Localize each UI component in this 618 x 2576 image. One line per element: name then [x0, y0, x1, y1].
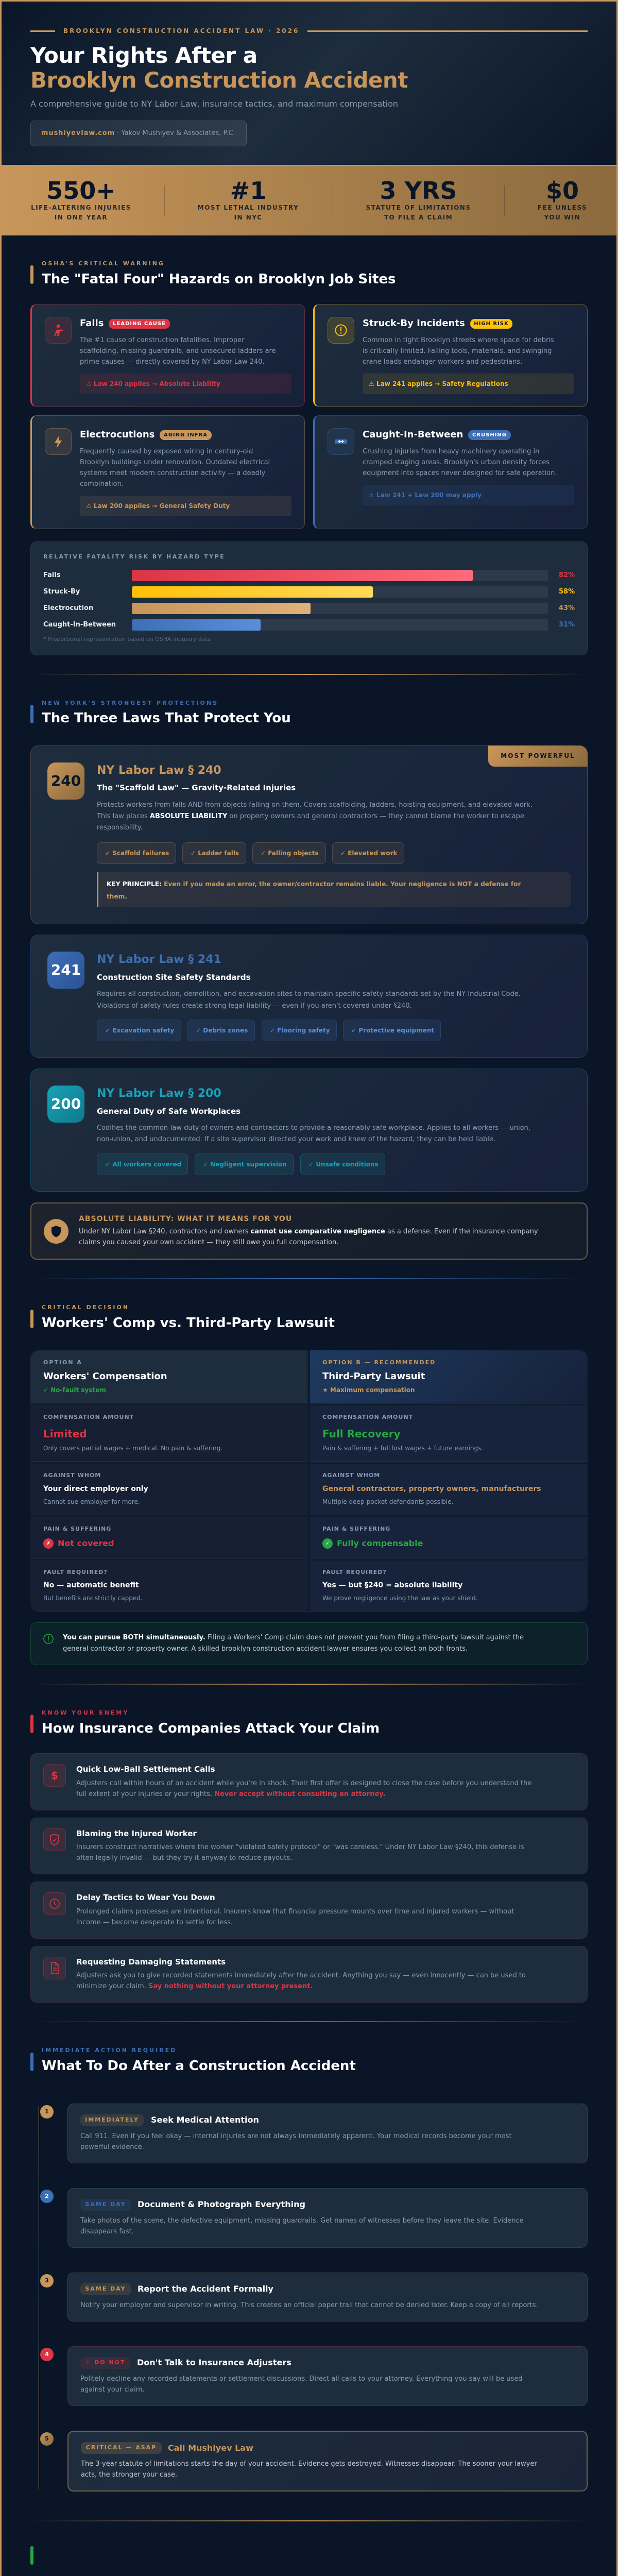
law description: responsibility.	[97, 824, 143, 832]
time pill: IMMEDIATELY	[85, 2116, 139, 2123]
description	[76, 1972, 526, 1990]
title: Quick Low-Ball Settlement Calls	[76, 1765, 215, 1774]
time pill	[80, 2114, 144, 2126]
callout text: Under NY Labor Law §240, contractors and owners cannot use comparative negligence as a defense. Even if the insurance company	[79, 1228, 538, 1235]
row: pain and suffering, left: Not covered	[58, 1538, 114, 1548]
ribbon: most powerful: MOST POWERFUL	[501, 752, 575, 759]
callout	[80, 496, 291, 516]
chart footnote: * Proportional representation based on OSHA industry data	[43, 636, 211, 642]
header: option b: ★ Maximum compensation	[322, 1386, 415, 1394]
hero header	[0, 0, 618, 165]
hero eyebrow rule left	[30, 30, 55, 32]
section heading: insurance: How Insurance Companies Attack Your Claim	[42, 1721, 380, 1736]
hero title	[30, 43, 408, 93]
bar: falls: Falls	[43, 571, 61, 579]
header: option a	[30, 1350, 307, 1403]
description: income — become desperate to settle for less.	[76, 1919, 233, 1926]
law description	[97, 990, 521, 1010]
header: option b: Third-Party Lawsuit	[322, 1371, 425, 1382]
step title: Report the Accident Formally	[138, 2284, 273, 2294]
title: Caught-In-Between	[363, 429, 463, 440]
tag: falling objects	[252, 842, 326, 864]
bar chart panel	[30, 541, 588, 655]
panel: law 240	[30, 745, 588, 924]
callout	[80, 374, 291, 394]
step title: Seek Medical Attention	[151, 2115, 259, 2125]
row: compensation amount, left: Limited	[43, 1428, 87, 1440]
header: option a: ✓ No-fault system	[43, 1386, 106, 1394]
description: Prolonged claims processes are intentional. Insurers know that financial pressure mounts over time and injured workers — without	[76, 1908, 514, 1916]
row: fault required, right: Yes — but §240 = absolute liability	[322, 1581, 462, 1589]
row: pain and suffering, right: ✓	[325, 1540, 330, 1547]
law number 241: 241	[51, 961, 81, 978]
row: pain and suffering, left: ✗	[46, 1540, 51, 1547]
step text	[80, 2131, 512, 2153]
tag: debris zones	[187, 1020, 255, 1041]
stat: 550+: 550+	[46, 177, 116, 205]
description: often legally invalid — but they try it anyway to reduce payouts.	[76, 1854, 292, 1862]
time pill	[80, 2283, 131, 2295]
title: Delay Tactics to Wear You Down	[76, 1893, 215, 1902]
panel: delay tactics	[30, 1882, 588, 1939]
tag: excavation safety	[97, 1020, 181, 1041]
stat: #1	[198, 177, 299, 221]
law title: NY Labor Law § 200	[97, 1087, 221, 1100]
stat: 550+	[31, 177, 131, 221]
law subtitle: The "Scaffold Law" — Gravity-Related Injuries	[97, 783, 296, 792]
bar: falls	[43, 570, 575, 581]
step text: The 3-year statute of limitations starts the day of your accident. Evidence gets destroyed. Witnesses disappear. The sooner your lawyer	[81, 2460, 537, 2468]
website pill: mushiyevlaw.com · Yakov Mushiyev & Associates, P.C.	[41, 129, 235, 137]
tag: scaffold failures	[97, 842, 176, 864]
section heading: what to do: What To Do After a Construction Accident	[42, 2058, 356, 2074]
description: minimize your claim. Say nothing without your attorney present.	[76, 1982, 313, 1990]
description	[363, 448, 557, 477]
time pill: CRITICAL — ASAP	[86, 2444, 157, 2451]
section heading: what to do	[30, 2047, 356, 2074]
description: Crushing injuries from heavy machinery operating in	[363, 448, 539, 455]
header: option a: Workers' Compensation	[43, 1371, 167, 1382]
icon: dollar	[43, 1764, 66, 1787]
law description	[97, 801, 533, 832]
step 5 marker	[40, 2432, 54, 2446]
badge: HIGH RISK	[474, 321, 509, 327]
section heading: fatal four: The "Fatal Four" Hazards on Brooklyn Job Sites	[42, 272, 396, 287]
step 3 marker	[40, 2274, 54, 2287]
description: Brooklyn buildings under renovation. Outdated electrical	[80, 459, 270, 466]
stat: $0: FEE UNLESS	[538, 204, 587, 211]
badge	[468, 430, 511, 440]
icon: dollar: $	[51, 1769, 58, 1782]
callout: absolute liability	[30, 1202, 588, 1260]
description: prime causes — directly covered by NY Labor Law 240.	[80, 358, 265, 366]
tag: ladder falls: ✓ Ladder falls	[191, 850, 239, 857]
stat: 550+: IN ONE YEAR	[55, 214, 108, 221]
ribbon: most powerful	[488, 745, 588, 767]
callout	[363, 374, 574, 394]
key principle: KEY PRINCIPLE: Even if you made an error, the owner/contractor remains liable. Your negligence is NOT a defense for	[107, 880, 521, 888]
icon: crushing arrows	[328, 428, 354, 455]
step text: powerful evidence.	[80, 2143, 144, 2151]
tag: all workers covered: ✓ All workers covered	[105, 1161, 181, 1168]
law 240 content	[47, 762, 571, 907]
bar: electrocution: 43%	[559, 604, 575, 612]
callout text: general contractor or property owner. A skilled brooklyn construction accident lawyer ensures you collect on both fronts.	[63, 1645, 468, 1653]
tag: ladder falls	[182, 842, 246, 864]
tag: flooring safety: ✓ Flooring safety	[270, 1027, 330, 1034]
row: compensation amount, left	[30, 1405, 307, 1462]
callout text: claims you caused your own accident — they still owe you full compensation.	[79, 1239, 338, 1246]
stat: $0	[538, 177, 587, 221]
section heading: fatal four: OSHA'S CRITICAL WARNING	[42, 260, 165, 267]
callout	[363, 485, 574, 505]
section heading: three laws	[30, 700, 291, 726]
callout text	[79, 1228, 538, 1246]
bar: caught-in-between: Caught-In-Between	[43, 621, 116, 629]
title: Blaming the Injured Worker	[76, 1829, 197, 1838]
section heading: three laws: The Three Laws That Protect You	[42, 710, 291, 726]
tag: falling objects: ✓ Falling objects	[261, 850, 319, 857]
key principle: them.	[107, 893, 127, 900]
step text: acts, the stronger your case.	[81, 2471, 177, 2479]
section heading: what to do: IMMEDIATE ACTION REQUIRED	[42, 2047, 177, 2054]
icon: exclamation circle	[43, 1634, 54, 1644]
row: against whom, left: Your direct employer only	[43, 1485, 148, 1493]
callout: ⚠ Law 241 applies → Safety Regulations	[369, 380, 508, 387]
time pill	[80, 2357, 130, 2369]
stat: $0: $0	[546, 177, 579, 205]
card: falls	[30, 304, 305, 407]
description	[79, 336, 276, 366]
row: against whom, left: AGAINST WHOM	[43, 1472, 101, 1479]
stat: #1: #1	[230, 177, 266, 205]
step text: disappears fast.	[80, 2228, 134, 2235]
hero eyebrow: BROOKLYN CONSTRUCTION ACCIDENT LAW · 2026	[63, 27, 299, 35]
time pill	[80, 2199, 131, 2211]
icon: lightning bolt	[45, 428, 72, 455]
comparison table	[30, 1350, 588, 1612]
hero eyebrow rule right	[307, 30, 588, 32]
description: crane loads endanger workers and pedestrians.	[363, 358, 522, 366]
description: Adjusters call within hours of an accident while you're in shock. Their first offer is designed to close the case before you understand the	[76, 1780, 531, 1787]
callout text: You can pursue BOTH simultaneously. Filing a Workers' Comp claim does not prevent you from filing a third-party lawsuit against the	[63, 1634, 524, 1641]
law number 200: 200	[51, 1095, 81, 1112]
tag: flooring safety	[262, 1020, 337, 1041]
icon: shield check	[43, 1828, 66, 1851]
row: fault required, left	[30, 1561, 307, 1612]
law number 241	[47, 952, 84, 989]
description: full extent of your injuries or your rights. Never accept without consulting an attorney.	[76, 1790, 385, 1798]
description	[76, 1780, 531, 1798]
header: option b	[310, 1350, 588, 1403]
bar: caught-in-between: 31%	[559, 621, 575, 629]
law description: Protects workers from falls AND from objects falling on them. Covers scaffolding, ladders, hoisting equipment, and elevated work.	[97, 801, 533, 809]
step text: Call 911. Even if you feel okay — internal injuries are not always immediately apparent. Your medical records become your most	[80, 2132, 512, 2140]
tag: excavation safety: ✓ Excavation safety	[105, 1027, 174, 1034]
description: Insurers construct narratives where the worker "violated safety protocol" or "was careless." Under NY Labor Law §240, this defense is	[76, 1843, 524, 1851]
bar: struck-by: Struck-By	[43, 588, 80, 596]
step text	[81, 2459, 537, 2480]
step title: Document & Photograph Everything	[138, 2199, 305, 2209]
row: compensation amount, right: Full Recovery	[322, 1428, 401, 1440]
icon: document	[43, 1957, 66, 1979]
key principle	[97, 872, 571, 907]
callout heading: ABSOLUTE LIABILITY: WHAT IT MEANS FOR YOU	[79, 1215, 292, 1223]
icon: warning circle	[328, 317, 354, 344]
row: pain and suffering, right: Fully compensable	[337, 1538, 423, 1548]
tag: elevated work	[332, 842, 404, 864]
step 4 marker: 4	[45, 2351, 49, 2358]
tag: negligent supervision: ✓ Negligent supervision	[203, 1161, 287, 1168]
step title: Call Mushiyev Law	[168, 2443, 253, 2453]
chart title: RELATIVE FATALITY RISK BY HAZARD TYPE	[43, 553, 225, 560]
law number 200	[47, 1086, 84, 1123]
step 1 marker	[40, 2105, 54, 2119]
law description	[97, 1124, 530, 1143]
step 1 marker: 1	[45, 2108, 49, 2115]
description	[80, 448, 270, 488]
law number 240	[47, 762, 84, 800]
step 5 marker: 5	[45, 2435, 49, 2442]
panel: damaging statements	[30, 1946, 588, 2003]
badge: AGING INFRA	[164, 432, 208, 438]
law subtitle: Construction Site Safety Standards	[97, 973, 251, 982]
step text: Take photos of the scene, the defective equipment, missing guardrails. Get names of witnesses before they leave the site. Evidence	[80, 2217, 524, 2225]
bar: struck-by	[43, 586, 575, 598]
step 5 card	[67, 2431, 588, 2492]
website pill	[30, 121, 247, 146]
hero title: Your Rights After a	[30, 43, 258, 68]
step 3 card	[67, 2273, 588, 2321]
row: against whom, left	[30, 1464, 307, 1515]
panel: law 241	[30, 935, 588, 1058]
bar: falls: 82%	[559, 571, 575, 579]
hero subtitle: A comprehensive guide to NY Labor Law, insurance tactics, and maximum compensation	[30, 99, 398, 109]
tag: unsafe conditions	[300, 1154, 385, 1175]
tag: negligent supervision	[195, 1154, 294, 1175]
section heading: fatal four	[30, 260, 396, 287]
bar: electrocution	[43, 603, 575, 614]
description: combination.	[80, 480, 124, 488]
section heading: three laws: NEW YORK'S STRONGEST PROTECTIONS	[42, 700, 218, 706]
tag: scaffold failures: ✓ Scaffold failures	[105, 850, 169, 857]
stat: 3 YRS: STATUTE OF LIMITATIONS	[366, 204, 471, 211]
panel: low-ball calls	[30, 1753, 588, 1810]
law subtitle: General Duty of Safe Workplaces	[97, 1107, 241, 1116]
step title: Don't Talk to Insurance Adjusters	[137, 2358, 291, 2367]
row: against whom, right: Multiple deep-pocket defendants possible.	[322, 1498, 453, 1505]
description: Adjusters ask you to give recorded statements immediately after the accident. Anything you say — even innocently — can be used to	[76, 1972, 526, 1979]
title: Struck-By Incidents	[363, 318, 465, 329]
time pill	[81, 2442, 162, 2454]
step text: Notify your employer and supervisor in writing. This creates an official paper trail that cannot be denied later. Keep a copy of all reports.	[80, 2301, 538, 2309]
row: fault required, left: But benefits are strictly capped.	[43, 1595, 143, 1602]
card: struck-by	[313, 304, 588, 407]
step text	[80, 2374, 522, 2395]
row: pain and suffering, right: PAIN & SUFFERING	[322, 1526, 390, 1532]
callout text	[63, 1634, 524, 1653]
icon: falling person	[45, 317, 72, 344]
row: pain and suffering, left	[30, 1517, 307, 1558]
step 1 card	[67, 2104, 588, 2163]
step 2 card	[67, 2188, 588, 2248]
description: cramped staging areas. Brooklyn's urban density forces	[363, 459, 550, 466]
row: fault required, right: We prove negligence using the law as your shield.	[322, 1595, 478, 1602]
law title: NY Labor Law § 240	[97, 764, 221, 777]
description: Common in tight Brooklyn streets where space for debris	[363, 336, 554, 344]
tag: elevated work: ✓ Elevated work	[340, 850, 397, 857]
hero title: Brooklyn Construction Accident	[30, 67, 408, 93]
stat: #1: MOST LETHAL INDUSTRY	[198, 204, 299, 211]
stat: $0: YOU WIN	[544, 214, 580, 221]
law description: non-union, and undocumented. If a site supervisor directed your work and knew of the hazard, they can be held liable.	[97, 1136, 495, 1143]
callout: ⚠ Law 241 + Law 200 may apply	[369, 492, 482, 499]
card: caught-in-between	[313, 415, 588, 529]
law description: Codifies the common-law duty of owners and contractors to provide a reasonably safe workplace. Applies to all workers — union,	[97, 1124, 530, 1132]
step 3 marker: 3	[45, 2277, 49, 2284]
row: against whom, right: AGAINST WHOM	[322, 1472, 380, 1479]
step text: Politely decline any recorded statements or settlement discussions. Direct all calls to your attorney. Everything you say will be used	[80, 2375, 522, 2383]
tag: protective equipment	[343, 1020, 441, 1041]
row: against whom, right: General contractors, property owners, manufacturers	[322, 1485, 541, 1493]
row: fault required, left: No — automatic benefit	[43, 1581, 139, 1589]
row: pain and suffering, right	[310, 1517, 588, 1558]
header: option b: OPTION B — RECOMMENDED	[322, 1359, 436, 1366]
law title: NY Labor Law § 241	[97, 953, 221, 966]
tag: protective equipment: ✓ Protective equipment	[351, 1027, 434, 1034]
stat: #1: IN NYC	[234, 214, 262, 221]
panel: blaming the worker	[30, 1818, 588, 1874]
law description: This law places ABSOLUTE LIABILITY on property owners and general contractors — they cannot blame the worker to escape	[97, 812, 524, 820]
description: is critically limited. Falling tools, materials, and swinging	[363, 347, 552, 355]
badge: CRUSHING	[472, 432, 507, 438]
section heading: insurance: KNOW YOUR ENEMY	[42, 1709, 129, 1716]
step 2 marker	[40, 2190, 54, 2203]
time pill: ⚠ DO NOT	[85, 2359, 126, 2366]
description: The #1 cause of construction fatalities. Improper	[80, 336, 244, 344]
row: fault required, right	[310, 1561, 588, 1612]
row: against whom, right	[310, 1464, 588, 1515]
header: option a: OPTION A	[43, 1359, 82, 1366]
badge	[470, 319, 512, 329]
step 2 marker: 2	[45, 2193, 49, 2199]
time pill: SAME DAY	[85, 2285, 126, 2292]
stat: 3 YRS: 3 YRS	[380, 177, 457, 205]
stat: 3 YRS: TO FILE A CLAIM	[384, 214, 453, 221]
tag: all workers covered	[97, 1154, 188, 1175]
row: fault required, left: FAULT REQUIRED?	[43, 1569, 108, 1575]
step 4 marker	[40, 2348, 54, 2361]
description	[76, 1843, 524, 1862]
step 4 card	[67, 2346, 588, 2406]
card: electrocutions	[30, 415, 305, 529]
title: Falls	[80, 318, 104, 329]
bar: struck-by: 58%	[559, 588, 575, 596]
panel: law 200	[30, 1069, 588, 1192]
stats band	[0, 165, 618, 235]
section heading: insurance	[30, 1709, 380, 1736]
callout: pursue both	[30, 1622, 588, 1665]
law number 240: 240	[51, 772, 81, 789]
description	[363, 336, 554, 366]
description	[76, 1908, 514, 1926]
title: Electrocutions	[80, 429, 154, 440]
description: scaffolding, missing guardrails, and unsecured ladders are	[80, 347, 276, 355]
callout: ⚠ Law 240 applies → Absolute Liability	[86, 380, 220, 387]
badge	[160, 430, 212, 440]
stat: 3 YRS	[366, 177, 471, 221]
law description: Violations of safety rules create strong legal liability — even if you aren't covered under §240.	[97, 1002, 412, 1010]
row: pain and suffering, left: PAIN & SUFFERING	[43, 1526, 111, 1532]
bar chart rows	[43, 570, 575, 642]
law description: Requires all construction, demolition, and excavation sites to maintain specific safety standards set by the NY Industrial Code.	[97, 990, 521, 998]
description: equipment into spaces never designed for safe operation.	[363, 469, 557, 477]
title: Requesting Damaging Statements	[76, 1957, 226, 1967]
row: compensation amount, right: Pain & suffering + full lost wages + future earnings.	[322, 1445, 483, 1452]
section heading: comparison	[30, 1304, 335, 1331]
tag: debris zones: ✓ Debris zones	[196, 1027, 248, 1034]
row: fault required, right: FAULT REQUIRED?	[322, 1569, 387, 1575]
row: against whom, left: Cannot sue employer for more.	[43, 1498, 140, 1505]
bar: electrocution: Electrocution	[43, 604, 93, 612]
step text: against your claim.	[80, 2386, 145, 2394]
icon: clock	[43, 1892, 66, 1915]
icon: shield	[44, 1219, 68, 1244]
time pill: SAME DAY	[85, 2201, 126, 2208]
tag: unsafe conditions: ✓ Unsafe conditions	[308, 1161, 379, 1168]
step text	[80, 2215, 524, 2237]
row: compensation amount, right	[310, 1405, 588, 1462]
row: compensation amount, left: Only covers partial wages + medical. No pain & suffering.	[43, 1445, 222, 1452]
row: compensation amount, left: COMPENSATION AMOUNT	[43, 1414, 134, 1420]
description: Frequently caused by exposed wiring in century-old	[80, 448, 253, 455]
description: systems meet modern construction activity — a deadly	[80, 469, 265, 477]
row: compensation amount, right: COMPENSATION AMOUNT	[322, 1414, 413, 1420]
section heading: comparison: Workers' Comp vs. Third-Party Lawsuit	[42, 1315, 335, 1331]
badge	[109, 319, 170, 329]
callout: ⚠ Law 200 applies → General Safety Duty	[86, 502, 230, 510]
section heading: comparison: CRITICAL DECISION	[42, 1304, 129, 1311]
stat: 550+: LIFE-ALTERING INJURIES	[31, 204, 131, 211]
bar: caught-in-between	[43, 619, 575, 631]
badge: LEADING CAUSE	[113, 321, 166, 327]
section accent bar: green	[30, 2546, 33, 2565]
